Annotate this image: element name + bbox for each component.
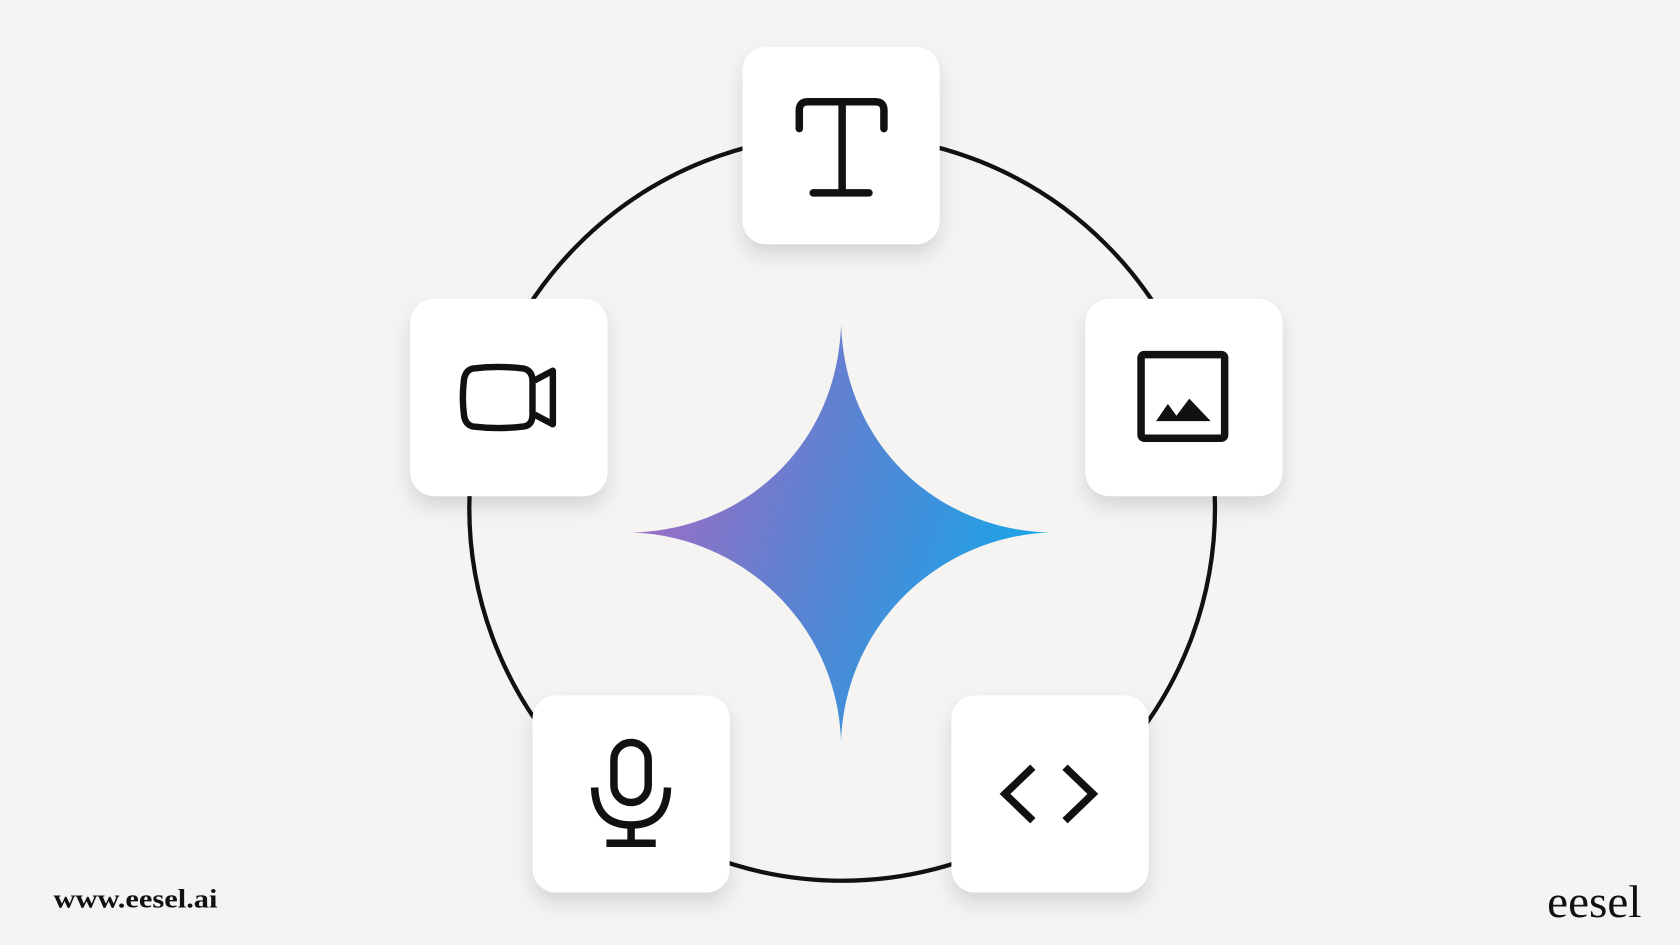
card: microphone [532,695,730,892]
icon: text T [799,102,884,193]
card: image [1085,299,1282,496]
icon: image [1141,355,1225,438]
ring circle [469,135,1215,881]
card: text [742,47,940,244]
icon: code brackets [1005,767,1093,821]
logo: eesel: eesel [1547,877,1641,927]
icon: microphone [595,742,668,843]
card: code [951,695,1149,892]
footer url: www.eesel.ai [54,883,218,913]
icon: video camera [463,367,553,428]
card: video [410,299,608,496]
gradient star [632,325,1050,741]
